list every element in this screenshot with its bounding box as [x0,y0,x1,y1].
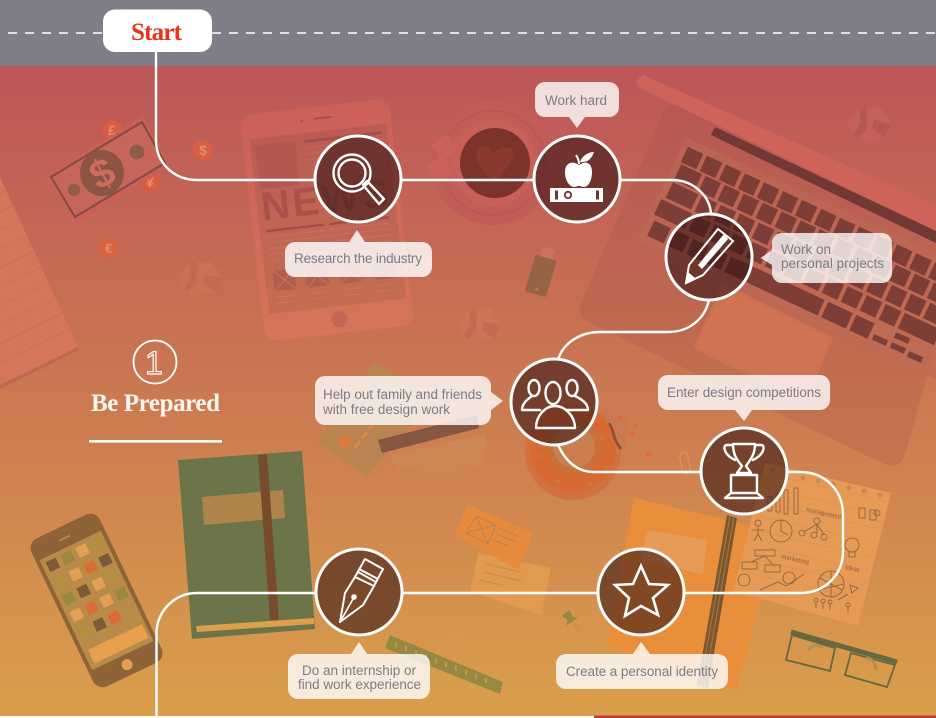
icon: star [615,566,668,616]
illustration: tablet with news [240,98,414,342]
illustration: donut [525,404,652,500]
illustration: notes with doodles: management [806,505,842,521]
callout: do an internship [288,642,430,699]
illustration: banknote [46,116,170,224]
step: help out family and friends [511,359,597,445]
illustration: notes with doodles: ideas [845,563,861,574]
icon: pencil [686,229,733,283]
callout: work on personal projects [760,233,892,283]
icon: group of people [522,380,588,428]
illustration: small orange cards [455,505,551,615]
illustration: laptop [580,75,936,466]
illustration: green book [178,451,315,639]
icon: fountain pen nib [340,559,383,622]
illustration: currency coins [99,120,213,258]
illustration: paper clips [447,451,691,646]
callout: work hard: Work hard [545,93,607,108]
illustration: credit card and receipt [318,362,488,482]
callout: work on personal projects: Work on [781,242,831,257]
callout: do an internship: find work experience [298,677,421,692]
callout: create a personal identity: Create a personal identity [566,664,718,679]
illustration: crystal shape right [847,107,891,143]
illustration: banknote: $ [82,149,123,199]
illustration: notes with doodles: marketing [781,552,810,566]
section heading: be prepared [89,340,222,443]
illustration: coffee cup [427,101,555,225]
illustration: currency coins: € [105,240,113,256]
callout: research the industry [285,230,432,277]
callout: enter design competitions [658,375,830,421]
illustration: smartphone [27,510,166,691]
callout: help out family and friends: Help out family and friends [323,387,482,402]
icon: magnifying glass [334,154,384,204]
illustration: glasses [786,632,897,687]
icon: apple on book [550,152,603,202]
callout: work on personal projects: personal projects [781,256,884,271]
step: create a personal identity [598,549,684,635]
illustration: currency coins: $ [199,142,207,158]
header road band [0,0,936,66]
step: work hard [534,136,620,222]
connector path [156,52,843,716]
bottom edge strip [0,716,936,718]
step: enter design competitions [701,428,787,514]
callout: enter design competitions: Enter design competitions [667,385,821,400]
callout: help out family and friends [315,376,503,425]
illustration: usb stick [525,245,560,297]
callout: create a personal identity [556,642,728,689]
illustration: push pin [560,609,585,635]
start label: Start [131,19,183,46]
step: research the industry [315,136,401,222]
callout: research the industry: Research the industry [294,251,422,266]
section heading: be prepared: Be Prepared [91,390,220,417]
illustration: currency coins: £ [108,122,116,138]
illustration: crystal shape centre [458,308,501,344]
start label [103,10,212,52]
callout: do an internship: Do an internship or [302,663,416,678]
section heading: be prepared: 1 [145,345,163,381]
illustration: currency coins: ¥ [146,174,154,190]
illustration: orange notebook [606,498,770,690]
illustration: lined notepad [0,177,79,389]
icon: trophy [724,444,764,498]
callout: help out family and friends: with free design work [322,402,450,417]
illustration: tablet with news: NEWS [259,171,391,229]
illustration: notes with doodles [733,463,891,626]
illustration: crystal shape left [178,262,222,297]
illustration: ruler [385,635,503,694]
step: work on personal projects [666,214,752,300]
callout: work hard [535,82,619,128]
step: do an internship [316,549,402,635]
